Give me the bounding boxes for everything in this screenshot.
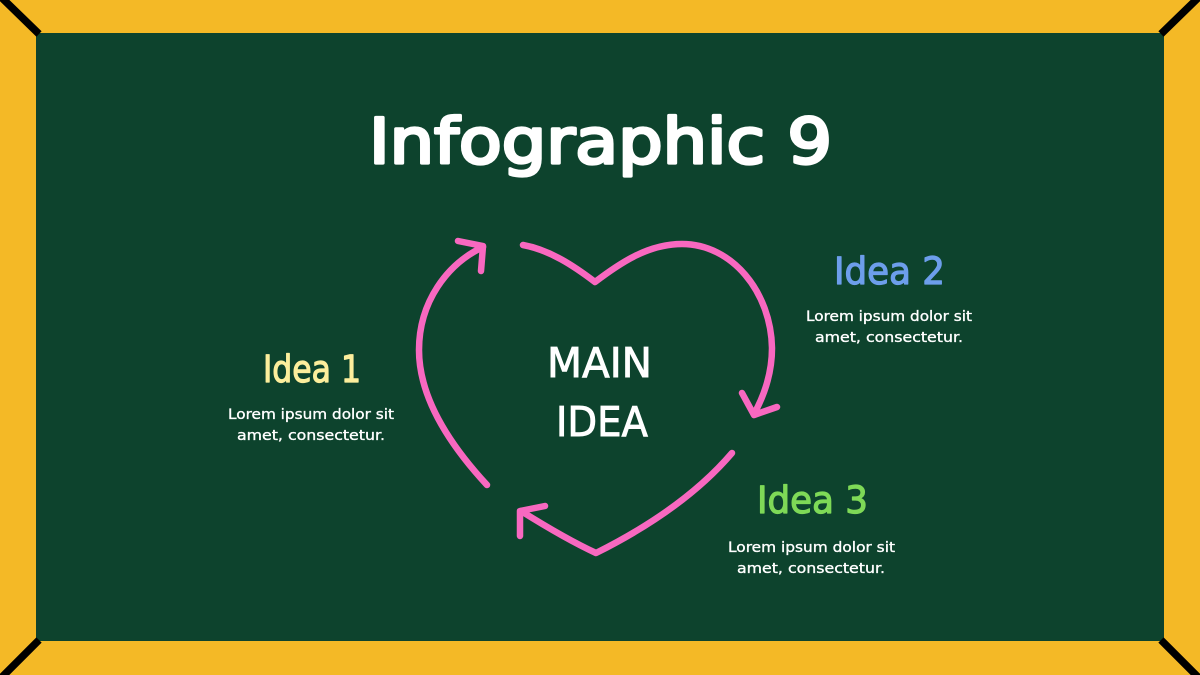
heart cycle diagram	[419, 241, 777, 553]
idea 3 heading: Idea 3	[757, 479, 868, 522]
idea 3 text	[728, 540, 895, 577]
title: Infographic 9	[369, 105, 832, 178]
idea 2 heading: Idea 2	[834, 250, 945, 293]
idea 2 text: amet, consectetur.	[815, 330, 963, 346]
idea 1 text: Lorem ipsum dolor sit	[228, 407, 394, 423]
idea 2 text: Lorem ipsum dolor sit	[806, 309, 972, 325]
idea 3 text: amet, consectetur.	[737, 561, 885, 577]
idea 3 text: Lorem ipsum dolor sit	[728, 540, 895, 556]
idea 2 text	[806, 309, 972, 346]
idea 2 block	[806, 250, 972, 346]
idea 1 block	[228, 348, 394, 444]
arrow: top to right	[523, 244, 777, 415]
main idea label: MAIN	[547, 339, 652, 387]
arrow: right to bottom	[520, 453, 732, 553]
idea 1 text: amet, consectetur.	[237, 428, 385, 444]
main idea label: IDEA	[556, 398, 648, 446]
idea 1 heading: Idea 1	[263, 348, 361, 391]
idea 3 block	[728, 479, 895, 577]
idea 1 text	[228, 407, 394, 444]
arrow: bottom to top	[419, 241, 487, 485]
main idea label	[547, 339, 652, 446]
